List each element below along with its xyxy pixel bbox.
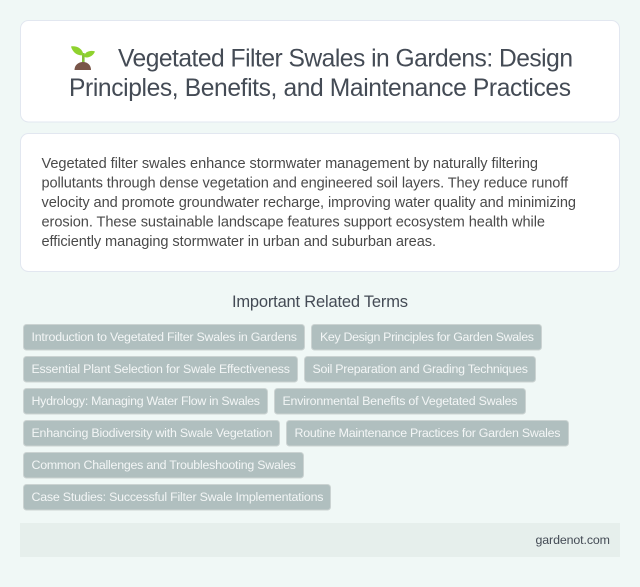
tag: case studies: Case Studies: Successful Filter Swale Implementations [32, 490, 324, 504]
tag: environmental benefits [274, 388, 526, 414]
heading: related terms: Important Related Terms [232, 293, 408, 311]
panel: description card [20, 134, 620, 272]
text block: description: efficiently managing stormwater in urban and suburban areas. [42, 234, 436, 250]
text block: description: pollutants through dense vegetation and engineered soil layers. They reduce runoff [42, 176, 569, 192]
tag: plant selection [24, 356, 298, 382]
tag: key design principles: Key Design Principles for Garden Swales [320, 330, 534, 344]
text block: description: erosion. These sustainable landscape features support ecosystem health while [42, 214, 545, 230]
tag: biodiversity [24, 420, 280, 446]
tag: introduction [24, 324, 304, 350]
text block: description [42, 156, 576, 250]
tag: soil preparation: Soil Preparation and Grading Techniques [312, 362, 528, 376]
panel: title card [20, 20, 620, 122]
tag: biodiversity: Enhancing Biodiversity with Swale Vegetation [32, 426, 273, 440]
tag: common challenges: Common Challenges and Troubleshooting Swales [32, 458, 296, 472]
tag: soil preparation [304, 356, 536, 382]
tag: plant selection: Essential Plant Selection for Swale Effectiveness [32, 362, 290, 376]
tag: routine maintenance [286, 420, 568, 446]
tag: case studies [24, 484, 330, 510]
tag: hydrology [24, 388, 268, 414]
title: Principles, Benefits, and Maintenance Practices [69, 75, 571, 102]
tag: hydrology: Hydrology: Managing Water Flow in Swales [32, 394, 260, 408]
icon: seedling [71, 46, 95, 70]
tag: common challenges [24, 452, 304, 478]
tag: routine maintenance: Routine Maintenance Practices for Garden Swales [294, 426, 560, 440]
footer: gardenot.com [536, 533, 610, 547]
panel: related terms tags [24, 324, 568, 510]
tag: key design principles [312, 324, 542, 350]
tag: environmental benefits: Environmental Benefits of Vegetated Swales [282, 394, 518, 408]
footer [20, 523, 620, 557]
text block: description: velocity and promote groundwater recharge, improving water quality and minimizing [42, 195, 576, 211]
title [69, 46, 573, 102]
title: Vegetated Filter Swales in Gardens: Design [118, 46, 573, 72]
tag: introduction: Introduction to Vegetated Filter Swales in Gardens [32, 330, 297, 344]
text block: description: Vegetated filter swales enhance stormwater management by naturally filtering [42, 156, 538, 172]
